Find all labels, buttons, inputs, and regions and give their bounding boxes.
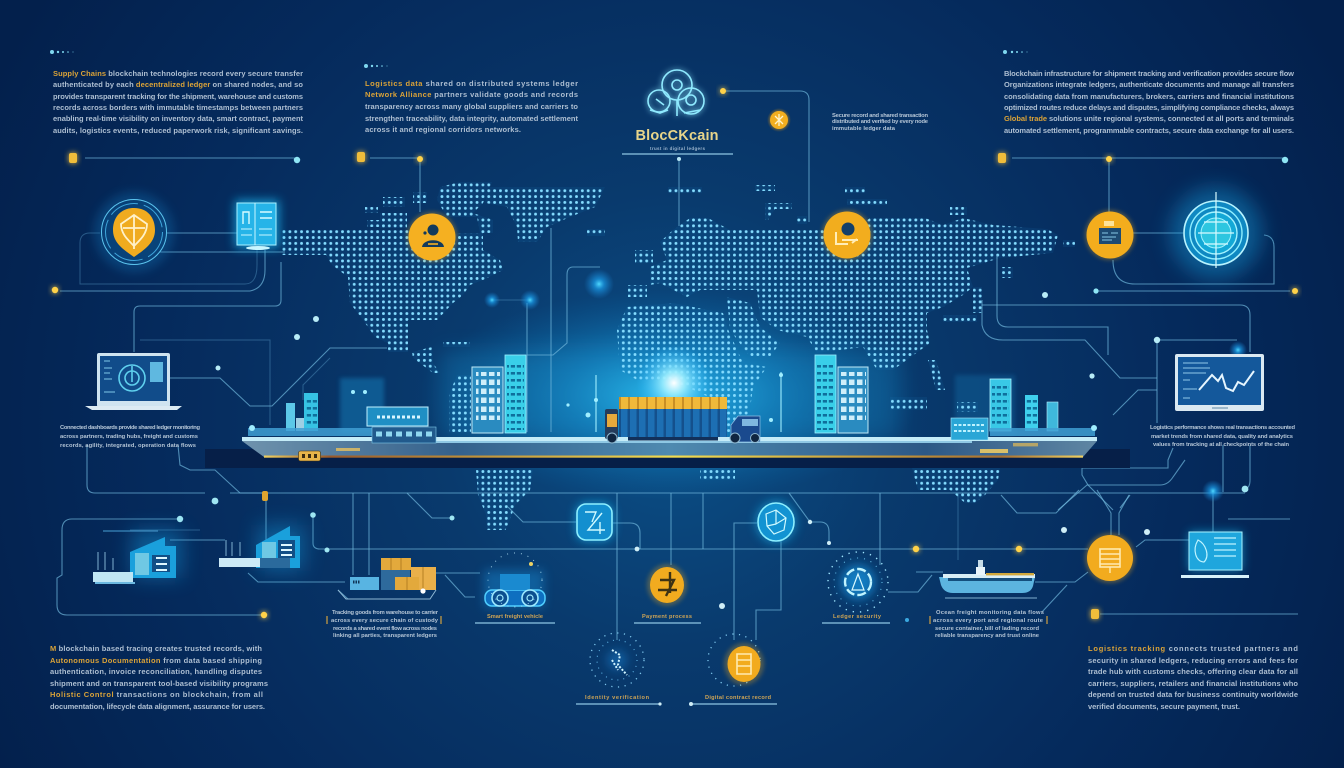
text block: top left: audits, logistics events, reduced paperwork risk, significant savings. [53,126,303,135]
text block: ship caption: Ocean freight monitoring data flows [936,610,1044,616]
gold icon: chart and globe [822,210,872,260]
caption: fingerprint [576,695,662,706]
text block: bottom left [50,644,268,711]
text block: ship caption [930,610,1047,639]
text block: bottom left: shipment and on transparent tool-based visibility programs [50,679,268,688]
circuit wires [57,91,1298,640]
text block: left laptop caption: records, agility, integrated, operation data flows [60,443,196,449]
text block: top middle: Network Alliance partners validate goods and records [365,90,578,99]
icon: left laptop [85,353,182,410]
icon: small gold badge [767,108,791,132]
text block: bottom right: verified documents, secure payment, trust. [1088,702,1240,711]
text block: top right [1004,69,1294,135]
text block: top middle: Logistics data shared on distributed systems ledger [365,79,578,88]
text block: bottom right: carriers, suppliers, retailers and financial institutions who [1088,679,1298,688]
city skyline [286,355,1058,433]
icon: glowing hex network [756,501,796,543]
truck and container [605,345,760,443]
caption: fingerprint: Identity verification [585,695,650,701]
text block: top left: authenticated by each decentralized ledger on shared nodes, and so [53,80,303,89]
text block: bottom right: trade hub with customs checks, offering clear data for all [1088,667,1298,676]
text block: boxes caption: records a shared event flow across nodes [333,626,437,632]
icon: gold document in dotted ring [708,634,764,686]
icon: dotted globe [828,552,888,612]
text block: top middle: strengthen traceability, data integrity, automated settlement [365,114,578,123]
text block: ship caption: across every port and regional route [933,618,1044,624]
text block: boxes caption: across every secure chain of custody [331,618,439,624]
text block: blockchain note: immutable ledger data [832,126,896,132]
caption: gold document [689,695,777,706]
gold icon: person [407,212,457,262]
caption: globe [822,614,890,623]
text block: boxes caption [327,610,441,639]
icon: glowing tablet [1181,532,1249,578]
text block: bottom right: depend on trusted data for business continuity worldwide [1088,690,1298,699]
gold icon: ledger document [1085,533,1135,583]
icon: cargo ship [939,560,1037,598]
text block: bottom left: documentation, lifecycle data alignment, assurance for users. [50,702,265,711]
icon: glowing vehicle [484,553,545,608]
title rule [622,153,733,155]
icon: blockchain cloud [648,70,704,116]
text block: blockchain note: Secure record and shared transaction [832,113,928,119]
text block: bottom right: Logistics tracking connects trusted partners and [1088,644,1298,653]
text block: bottom right [1088,644,1298,711]
text block: top left: enabling real-time visibility on inventory data, smart contract, payment [53,114,304,123]
text block: bottom left: M blockchain based tracing creates trusted records, with [50,644,262,653]
world dot map [270,170,1090,530]
text block: top left [53,69,304,135]
text block: left laptop caption: Connected dashboards provide shared ledger monitoring [60,425,200,431]
subtitle: trust in digital ledgers [650,146,705,151]
text block: bottom left: Autonomous Documentation from data based shipping [50,656,262,665]
icon: shield badge [94,192,174,272]
text block: top middle [365,79,578,134]
text block: right laptop caption: values from tracking at all checkpoints of the chain [1153,442,1289,448]
text block: blockchain note: distributed and verified by every node [832,119,929,125]
icon: glowing chip square [576,503,613,541]
title: BlocCKcain: BlocCKcain [636,128,718,144]
text block: top middle: transparency across many global suppliers and carriers to [365,102,578,111]
text block: top right: Global trade solutions unite regional systems, connected at all ports and terminals [1004,114,1294,123]
text block: blockchain note [832,113,929,132]
icon: warehouse right [219,525,304,571]
icon: cargo boxes [338,558,436,599]
text block: right laptop caption: Logistics performance shows real transactions accounted [1150,425,1295,431]
text block: top right: Organizations integrate ledgers, authenticate documents and manage all transfers [1004,80,1294,89]
text block: top left: records across borders with immutable timestamps between partners [53,103,303,112]
text block: top right: consolidating data from manufacturers, brokers, carriers and financial institutions [1004,92,1294,101]
caption: vehicle: Smart freight vehicle [487,614,543,620]
icon: document panel [235,200,279,250]
icon: dotted fingerprint [590,633,644,687]
text block: bottom left: Holistic Control transactions on blockchain, from all [50,690,263,699]
text block: right laptop caption: market trends from shared data, quality and analytics [1151,434,1293,440]
text block: top middle: across it and regional corridors networks. [365,125,521,134]
central glow [340,290,1015,500]
gold icon: document card [1085,210,1135,260]
caption: globe: Ledger security [833,614,882,620]
text block: top right: Blockchain infrastructure for shipment tracking and verification provides secure flow [1004,69,1294,78]
text block: right laptop caption [1150,425,1295,448]
text block: top right: automated settlement, programmable contracts, secure data exchange for all users. [1004,126,1294,135]
text block: top right: optimized routes reduce delays and disputes, simplifying compliance checks, always [1004,103,1294,112]
text block: ship caption: secure container, bill of lading record [935,626,1039,632]
text block: top left: provides transparent tracking for the shipment, warehouse and customs [53,92,303,101]
caption: gold chart [634,614,701,623]
building: left tall [472,367,503,433]
icon: radar target [1170,187,1262,279]
icon: right laptop chart [1175,354,1264,411]
text block: left laptop caption: across partners, trading hubs, freight and customs [60,434,198,440]
text block: bottom left: authentication, invoice reconciliation, handling disputes [50,667,262,676]
connector nodes [52,88,1298,622]
caption: gold document: Digital contract record [705,695,772,701]
text block: ship caption: reliable transparency and trust online [935,633,1040,639]
icon: gold chart badge [647,564,687,606]
platform base and band [205,428,1130,468]
text block: boxes caption: Tracking goods from warehouse to carrier [332,610,439,616]
decorative dot rows [50,50,1028,68]
caption: vehicle [475,614,555,623]
screens on platform [367,407,988,443]
text block: bottom right: security in shared ledgers, reducing errors and fees for [1088,656,1298,665]
caption: gold chart: Payment process [642,614,692,620]
text block: boxes caption: linking all parties, transparent ledgers [333,633,437,639]
icon: warehouse left [93,530,182,584]
glowing posts [249,372,1097,432]
text block: top left: Supply Chains blockchain technologies record every secure transfer [53,69,303,78]
text block: left laptop caption [60,425,200,449]
